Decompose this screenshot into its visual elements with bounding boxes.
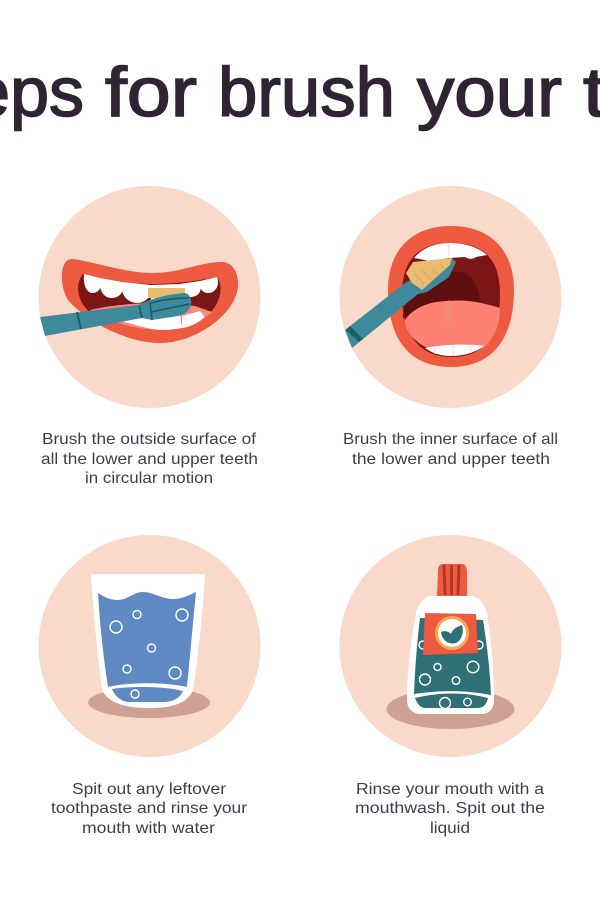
description: rinse with water — [51, 781, 248, 837]
illustration: open mouth with toothbrush on inner teeth — [340, 186, 562, 408]
description: inner surface — [343, 431, 558, 468]
illustration: mouth with toothbrush on outer teeth — [38, 186, 260, 408]
description: outside surface: all the lower and upper teeth — [41, 451, 258, 468]
panel: spit and rinse with water — [38, 535, 260, 837]
panel: brush outside surface — [38, 186, 260, 487]
icon: bottle label with leaf — [423, 613, 478, 655]
panel: brush inner surface — [340, 186, 562, 468]
title: brush — [218, 53, 395, 131]
description: inner surface: the lower and upper teeth — [352, 451, 550, 468]
icon: bottle cap — [437, 564, 467, 596]
panel: rinse with mouthwash — [340, 535, 562, 837]
description: rinse with mouthwash: liquid — [430, 820, 470, 837]
illustration: glass of water — [38, 535, 260, 757]
title — [0, 53, 600, 131]
icon: toothbrush — [345, 258, 456, 348]
icon: bubbles — [419, 641, 483, 708]
description: rinse with mouthwash — [355, 781, 545, 837]
title: for — [105, 53, 197, 131]
description: rinse with mouthwash: Rinse your mouth with a — [356, 781, 544, 798]
icon: toothbrush — [40, 288, 191, 336]
description: inner surface: Brush the inner surface of all — [343, 431, 558, 448]
description: outside surface: Brush the outside surface of — [42, 431, 257, 448]
description: rinse with mouthwash: mouthwash. Spit out the — [355, 800, 545, 817]
icon: bubbles — [110, 609, 188, 698]
description: outside surface — [41, 431, 258, 487]
title: your — [417, 53, 562, 131]
description: rinse with water: toothpaste and rinse your — [51, 800, 248, 817]
description: outside surface: in circular motion — [85, 470, 213, 487]
illustration: mouthwash bottle — [340, 535, 562, 757]
description: rinse with water: Spit out any leftover — [72, 781, 227, 798]
description: rinse with water: mouth with water — [82, 820, 216, 837]
